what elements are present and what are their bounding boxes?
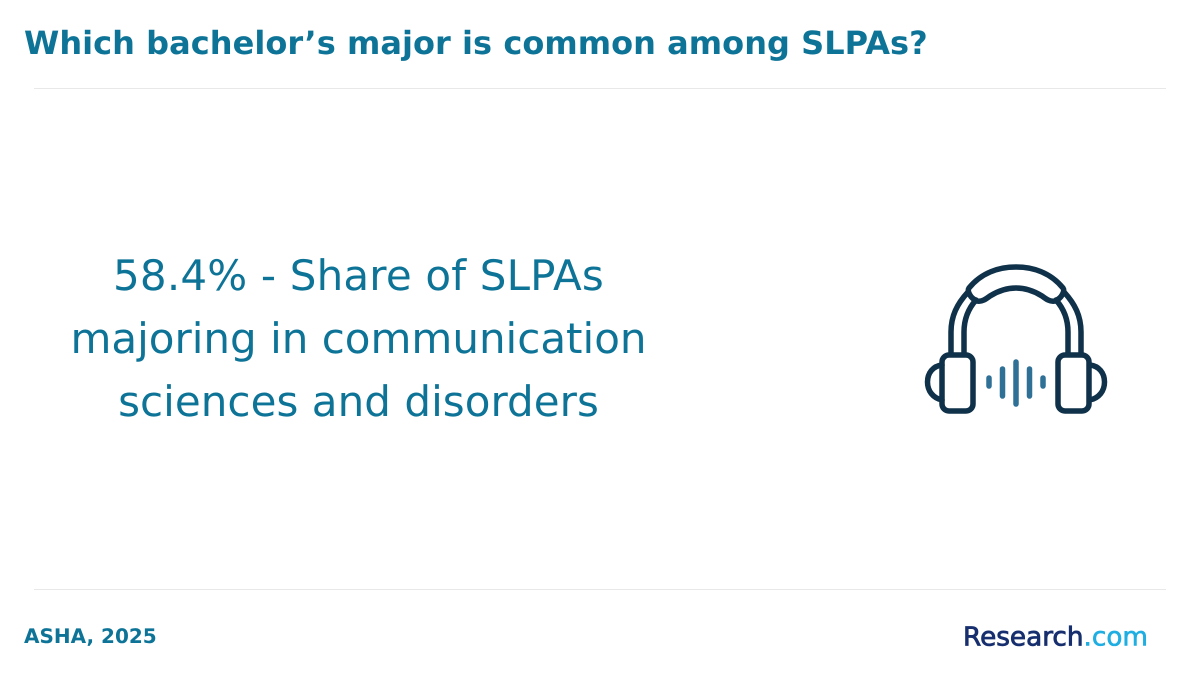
icon: headphones with sound wave (924, 264, 1108, 414)
source: ASHA, 2025 (24, 624, 157, 648)
title: Which bachelor’s major is common among SLPAs? (24, 24, 928, 62)
logo: Research.com: Research.com (963, 622, 1148, 652)
main statistic text: 58.4% - Share of SLPAs (113, 251, 604, 300)
main statistic text: sciences and disorders (118, 377, 599, 426)
main statistic text: majoring in communication (70, 314, 647, 363)
main statistic text (70, 251, 647, 426)
